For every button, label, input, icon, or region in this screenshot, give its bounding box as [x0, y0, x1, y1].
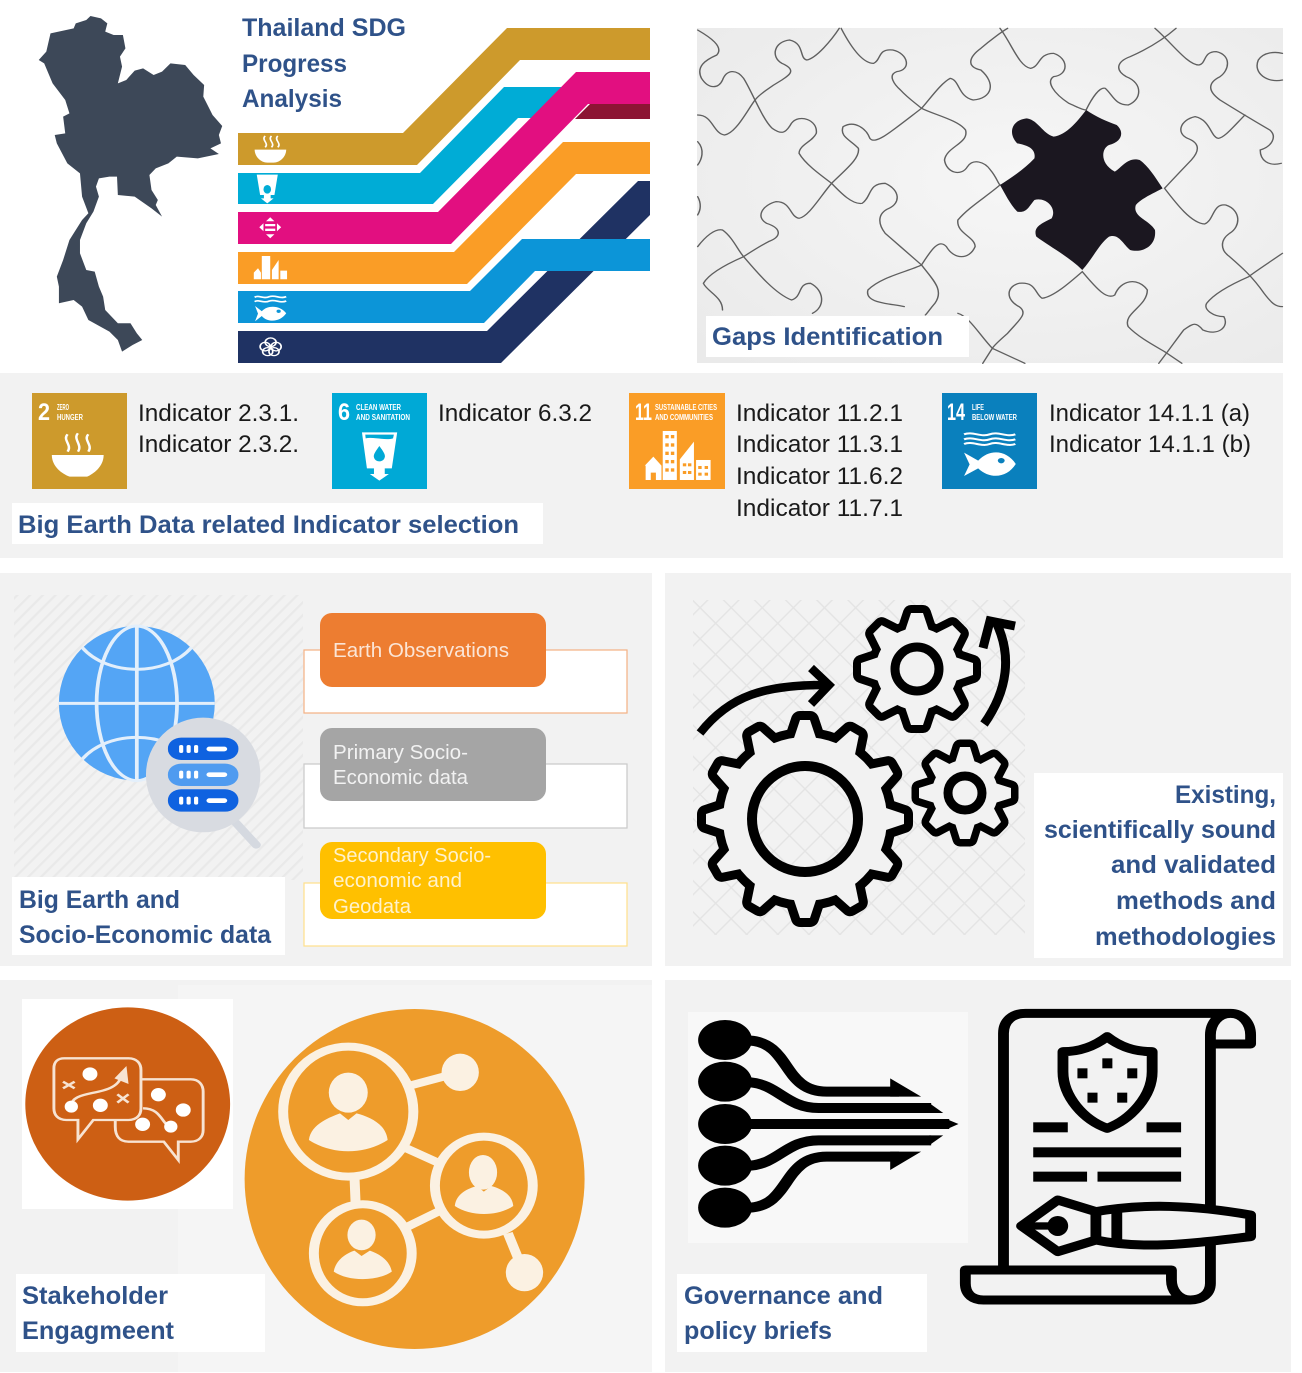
- data card: Primary Socio-Economic data: [304, 728, 627, 828]
- label: Stakeholder Engagmeent: Engagmeent: [22, 1317, 175, 1345]
- map of Thailand: [39, 16, 222, 352]
- SDG tile 2: [32, 393, 127, 489]
- panel: Big Earth and Socio-Economic data: [0, 573, 652, 966]
- indicators for SDG 11: Indicator 11.2.1: [736, 400, 903, 427]
- data card: Earth Observations: [304, 613, 627, 713]
- SDG tile 14: LIFE: [972, 403, 984, 412]
- label: Big Earth and Socio-Economic data: Socio-Economic data: [19, 921, 272, 949]
- icon: orange network of people: [245, 1009, 585, 1349]
- title: Thailand SDG Progress Analysis: Analysis: [242, 85, 342, 113]
- data card: Secondary Socio-economic and Geodata: economic and: [333, 870, 462, 892]
- data card: Earth Observations: Earth Observations: [333, 640, 509, 662]
- SDG tile 11: [629, 393, 725, 489]
- indicators for SDG 14: Indicator 14.1.1 (b): [1049, 431, 1251, 458]
- panel: governance and policy briefs: [665, 980, 1291, 1372]
- SDG tile 14: [942, 393, 1037, 489]
- icon: globe with data magnifier: [59, 626, 260, 845]
- indicators for SDG 14: [1049, 400, 1251, 458]
- SDG tile 11: 11: [635, 399, 652, 426]
- data card: Primary Socio-Economic data: Economic data: [333, 767, 469, 789]
- indicators for SDG 2: Indicator 2.3.2.: [138, 431, 299, 458]
- SDG tile 11: AND COMMUNITIES: [655, 413, 713, 422]
- indicators for SDG 11: [736, 400, 903, 522]
- label: existing methods: [1034, 773, 1283, 958]
- icon: policy scroll with shield and pen: [965, 1013, 1251, 1300]
- panel: existing methods: [665, 573, 1291, 966]
- label: existing methods: methods and: [1116, 887, 1276, 915]
- data card: Primary Socio-Economic data: Primary Socio-: [333, 742, 468, 764]
- indicators for SDG 11: Indicator 11.3.1: [736, 431, 903, 458]
- indicators for SDG 2: Indicator 2.3.1.: [138, 400, 299, 427]
- title: Thailand SDG Progress Analysis: Thailand SDG: [242, 14, 406, 42]
- SDG tile 14: 14: [947, 399, 965, 426]
- label: Big Earth and Socio-Economic data: Big Earth and: [19, 886, 180, 914]
- ribbon chart: SDG bands: [238, 28, 650, 363]
- icon: converging arrows: [698, 1020, 958, 1228]
- arrow: curved upward: [983, 621, 1015, 724]
- label: Big Earth and Socio-Economic data: [12, 877, 285, 955]
- title: Thailand SDG Progress Analysis: Progress: [242, 50, 347, 78]
- SDG tile 2: 2: [38, 399, 50, 426]
- data card: Secondary Socio-economic and Geodata: Secondary Socio-: [333, 845, 491, 867]
- label: existing methods: methodologies: [1095, 923, 1276, 951]
- SDG tile 6: AND SANITATION: [356, 413, 410, 422]
- indicators for SDG 2: [138, 400, 299, 458]
- label: Governance and policy briefs: [677, 1274, 927, 1352]
- SDG tile 2: ZERO: [57, 403, 69, 412]
- indicator for SDG 6: Indicator 6.3.2: [438, 400, 592, 427]
- panel: stakeholder engagement: [0, 980, 652, 1372]
- indicators for SDG 14: Indicator 14.1.1 (a): [1049, 400, 1250, 427]
- icon: small gear: [919, 747, 1011, 839]
- SDG tile 6: 6: [338, 399, 350, 426]
- label: Gaps Identification: [706, 316, 969, 357]
- puzzle seams and missing piece: [698, 28, 1282, 363]
- label: Big Earth Data related Indicator selection: Big Earth Data related Indicator selection: [18, 511, 519, 539]
- ribbon icons: [254, 136, 287, 356]
- data card: Secondary Socio-economic and Geodata: Geodata: [333, 896, 412, 918]
- label: Stakeholder Engagmeent: Stakeholder: [22, 1282, 168, 1310]
- label: Governance and policy briefs: policy briefs: [684, 1317, 832, 1345]
- icon: large gear: [706, 720, 904, 918]
- label: Gaps Identification: Gaps Identification: [712, 323, 943, 351]
- label: existing methods: scientifically sound: [1044, 816, 1276, 844]
- SDG tile 6: [332, 393, 427, 489]
- label: existing methods: Existing,: [1175, 781, 1276, 809]
- SDG tile 6: CLEAN WATER: [356, 403, 401, 412]
- label: Big Earth Data related Indicator selection: [12, 503, 543, 544]
- indicators for SDG 11: Indicator 11.6.2: [736, 463, 903, 490]
- panel: gaps identification puzzle: [697, 28, 1283, 363]
- SDG tile 14: BELOW WATER: [972, 413, 1017, 422]
- icon: medium gear: [861, 613, 973, 725]
- panel: Big Earth Data indicator selection: [0, 373, 1283, 558]
- SDG tile 2: HUNGER: [57, 413, 83, 422]
- label: existing methods: and validated: [1111, 851, 1276, 879]
- label: Stakeholder Engagmeent: [16, 1274, 265, 1352]
- data card: Secondary Socio-economic and Geodata: [304, 842, 627, 946]
- label: Governance and policy briefs: Governance and: [684, 1282, 883, 1310]
- arrow: curved to medium gear: [700, 668, 829, 733]
- indicators for SDG 11: Indicator 11.7.1: [736, 495, 903, 522]
- icon: orange discussion circle: [25, 1007, 230, 1201]
- title: Thailand SDG Progress Analysis: [242, 14, 406, 113]
- SDG tile 11: SUSTAINABLE CITIES: [655, 403, 717, 412]
